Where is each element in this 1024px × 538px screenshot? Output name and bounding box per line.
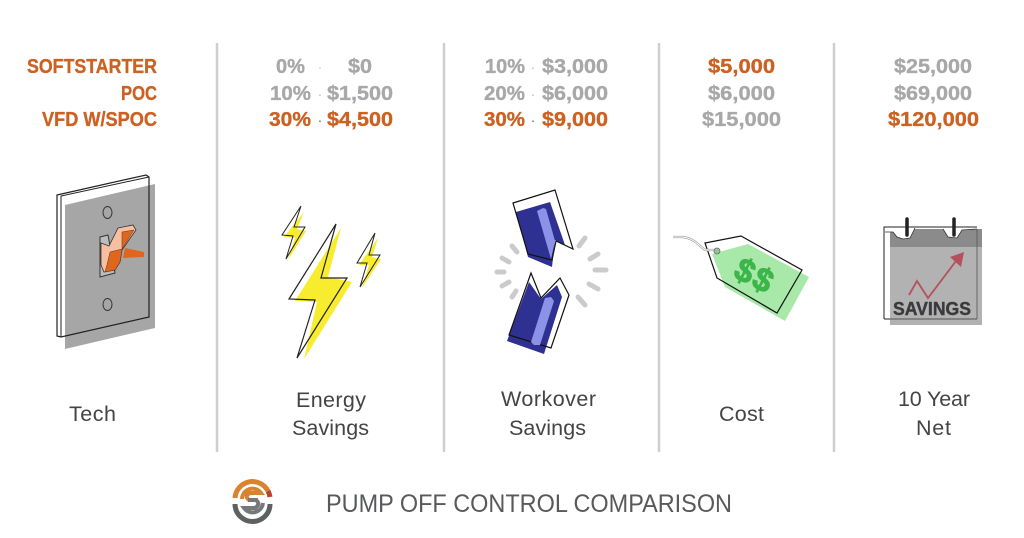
column: tech names: VFD W/SPOC <box>42 109 157 131</box>
label: cost: Cost <box>719 402 764 426</box>
label: workover savings: Savings <box>509 416 586 440</box>
column: energy savings figures: $0 <box>348 56 372 78</box>
column: energy savings figures: · <box>318 112 322 128</box>
column: workover savings figures: · <box>531 86 535 102</box>
column: energy savings figures: $4,500 <box>327 109 393 131</box>
label: workover savings <box>501 387 596 440</box>
column: workover savings figures: 30% <box>484 109 525 131</box>
column: workover savings figures: 10% <box>485 56 525 78</box>
column: energy savings figures: 10% <box>270 83 311 105</box>
column: 10 year net figures: $25,000 <box>894 56 972 78</box>
label: workover savings: Workover <box>501 387 596 411</box>
column: 10 year net figures <box>888 56 979 131</box>
column: workover savings figures <box>484 56 608 131</box>
icon: savings calendar: SAVINGS <box>893 299 971 319</box>
column: tech names <box>27 56 157 131</box>
column: energy savings figures: · <box>318 59 322 75</box>
column: energy savings figures: 30% <box>269 109 311 131</box>
column: workover savings figures: · <box>531 112 535 128</box>
label: energy savings: Savings <box>292 416 369 440</box>
icon: lightning bolts <box>282 206 381 359</box>
column: cost figures <box>702 56 781 131</box>
icon: savings calendar <box>884 219 982 325</box>
column: workover savings figures: 20% <box>484 83 525 105</box>
column: tech names: SOFTSTARTER <box>27 56 157 78</box>
icon: price tag: $ <box>728 250 762 291</box>
column: tech names: POC <box>121 83 157 105</box>
label: 10 year net: Net <box>916 416 951 440</box>
label: tech: Tech <box>69 402 116 426</box>
column: energy savings figures: · <box>318 86 322 102</box>
column: workover savings figures: · <box>531 59 535 75</box>
column: cost figures: $5,000 <box>708 56 775 78</box>
logo <box>235 482 270 522</box>
column: cost figures: $6,000 <box>708 83 775 105</box>
column: cost figures: $15,000 <box>702 109 781 131</box>
label: energy savings <box>292 388 369 440</box>
column: energy savings figures: $1,500 <box>327 83 393 105</box>
label: 10 year net: 10 Year <box>898 387 970 411</box>
column: workover savings figures: $6,000 <box>542 83 608 105</box>
column: energy savings figures: 0% <box>276 56 305 78</box>
column: energy savings figures <box>269 56 393 131</box>
icon: price tag: $ <box>746 259 780 300</box>
icon: light switch <box>57 175 155 349</box>
column: workover savings figures: $3,000 <box>542 56 608 78</box>
icon: broken rod <box>497 190 606 354</box>
title: PUMP OFF CONTROL COMPARISON <box>326 490 732 518</box>
column: workover savings figures: $9,000 <box>542 109 608 131</box>
label: 10 year net <box>898 387 970 440</box>
label: energy savings: Energy <box>296 388 366 412</box>
column: 10 year net figures: $120,000 <box>888 109 979 131</box>
icon: price tag <box>673 236 809 321</box>
column: 10 year net figures: $69,000 <box>894 83 972 105</box>
